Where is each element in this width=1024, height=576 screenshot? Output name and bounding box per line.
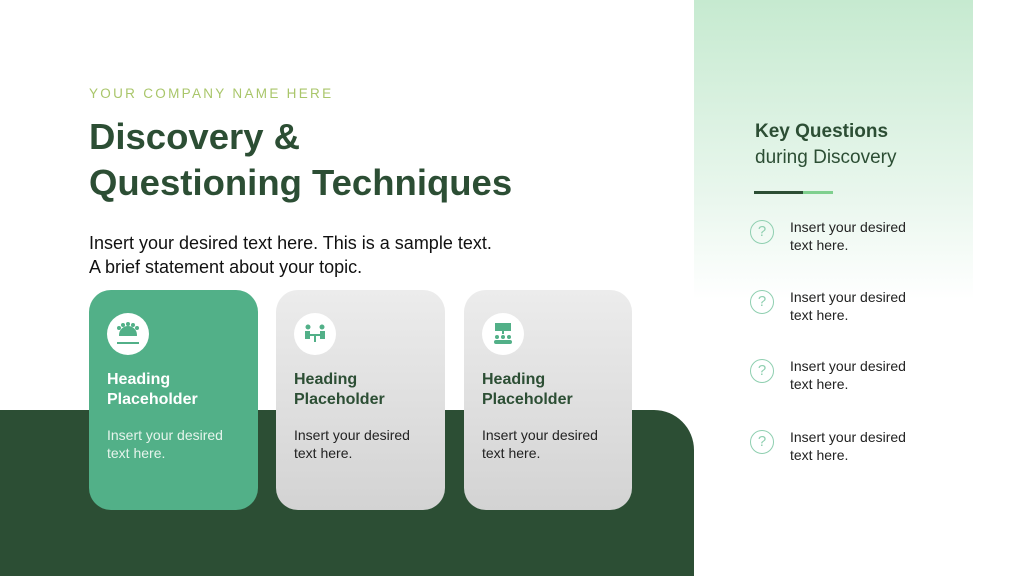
heading: Placeholder xyxy=(107,391,198,408)
question 2 xyxy=(750,289,906,323)
question 3: ? xyxy=(758,362,766,379)
title xyxy=(89,116,512,203)
intro text xyxy=(89,233,492,277)
text: text here. xyxy=(107,445,165,461)
text: Insert your desired xyxy=(107,427,223,443)
text xyxy=(482,427,598,461)
question 3: text here. xyxy=(790,376,848,392)
question 1: text here. xyxy=(790,237,848,253)
title: Questioning Techniques xyxy=(89,162,512,203)
dark green base block xyxy=(0,410,694,576)
heading xyxy=(107,371,198,408)
question 1 xyxy=(750,219,906,253)
heading: Heading xyxy=(294,371,357,388)
card 1 xyxy=(89,290,258,510)
right panel xyxy=(694,0,973,576)
intro text: Insert your desired text here. This is a sample text. xyxy=(89,233,492,253)
card 3 xyxy=(464,290,632,510)
text: text here. xyxy=(482,445,540,461)
side heading: Key Questions xyxy=(755,121,888,142)
text: Insert your desired xyxy=(482,427,598,443)
heading xyxy=(482,371,573,408)
question 3 xyxy=(750,358,906,392)
title: Discovery & xyxy=(89,116,300,157)
question 2: text here. xyxy=(790,307,848,323)
question 1: ? xyxy=(758,223,766,240)
heading: Placeholder xyxy=(482,391,573,408)
side heading xyxy=(755,121,896,168)
accent bar xyxy=(754,191,833,194)
heading: Heading xyxy=(107,371,170,388)
question 2: Insert your desired xyxy=(790,289,906,305)
icon: meeting table xyxy=(107,313,149,355)
side heading: during Discovery xyxy=(755,147,896,168)
company name: YOUR COMPANY NAME HERE xyxy=(89,86,333,101)
heading xyxy=(294,371,385,408)
icon: interview xyxy=(294,313,336,355)
text xyxy=(294,427,410,461)
text: text here. xyxy=(294,445,352,461)
text xyxy=(107,427,223,461)
question 4: ? xyxy=(758,433,766,450)
heading: Heading xyxy=(482,371,545,388)
intro text: A brief statement about your topic. xyxy=(89,257,362,277)
question 4 xyxy=(750,429,906,463)
question 4: Insert your desired xyxy=(790,429,906,445)
question 4: text here. xyxy=(790,447,848,463)
question 2: ? xyxy=(758,293,766,310)
text: Insert your desired xyxy=(294,427,410,443)
icon: presentation xyxy=(482,313,524,355)
heading: Placeholder xyxy=(294,391,385,408)
question 3: Insert your desired xyxy=(790,358,906,374)
card 2 xyxy=(276,290,445,510)
question 1: Insert your desired xyxy=(790,219,906,235)
